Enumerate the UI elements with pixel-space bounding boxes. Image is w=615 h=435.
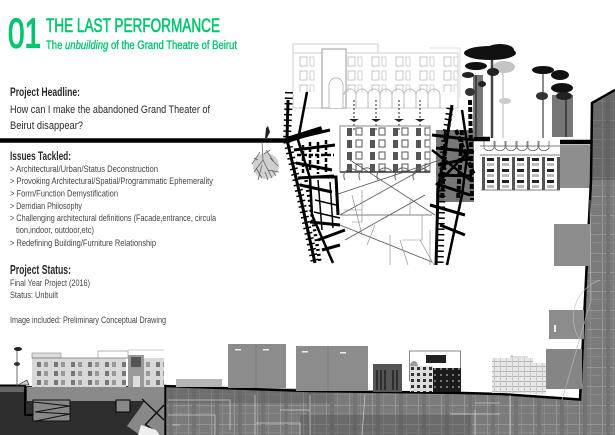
text: status: Final Year Project (2016)	[10, 278, 90, 288]
title: THE LAST PERFORMANCE	[46, 15, 220, 37]
small facade right	[480, 141, 560, 190]
trees	[462, 44, 573, 138]
list: issues: tion,indoor, outdoor,etc)	[16, 225, 94, 235]
small tree left	[14, 347, 29, 386]
heading: issues tackled: Issues Tackled:	[10, 149, 71, 163]
list: issues: > Derridian Philosophy	[10, 201, 82, 211]
dashed drop lines	[349, 100, 425, 130]
text: headline question	[10, 104, 211, 132]
small figure on line	[265, 126, 270, 138]
list: issues: > Redefining Building/Furniture Relationship	[10, 238, 156, 248]
text: headline question: How can I make the abandoned Grand Theater of	[10, 104, 211, 116]
crossing cut lines	[335, 160, 440, 265]
dark building	[373, 364, 402, 392]
subtitle: The unbuilding of the Grand Theatre of Beirut	[46, 40, 238, 52]
right ladder cluster	[430, 100, 474, 265]
main horizon line	[0, 139, 615, 142]
text: headline question: Beirut disappear?	[10, 120, 83, 132]
left ground line	[0, 386, 33, 415]
text: image note: Image included: Preliminary Conceptual Drawing	[10, 315, 166, 325]
left ground mass	[0, 386, 165, 435]
list: issues: > Provoking Architectural/Spatial/Programmatic Ephemerality	[10, 176, 213, 186]
grey massing blocks	[176, 224, 590, 391]
list: issues	[10, 164, 216, 248]
heading: project headline: Project Headline:	[10, 85, 80, 99]
corner building	[410, 351, 461, 392]
right and bottom textured section mass	[165, 90, 615, 435]
section interior light lines	[168, 200, 600, 435]
text: status	[10, 278, 90, 300]
list: issues: > Architectural/Urban/Status Deconstruction	[10, 164, 158, 174]
tree root drawing	[252, 142, 279, 180]
section outline	[165, 90, 615, 435]
dark shading on mass	[165, 92, 615, 435]
heading: project status: Project Status:	[10, 263, 71, 277]
lower theatre facade	[340, 126, 430, 180]
title number: 01	[8, 10, 41, 56]
light building	[492, 355, 546, 394]
left ladder cluster	[287, 92, 345, 263]
text: status: Status: Unbuilt	[10, 290, 58, 300]
left facade	[32, 350, 164, 387]
list: issues: > Form/Function Demystification	[10, 188, 118, 198]
left section basement	[27, 387, 164, 435]
list: issues: > Challenging architectural definitions (Facade,entrance, circula	[10, 213, 216, 223]
grey block behind line	[560, 145, 590, 188]
left ground strip	[0, 386, 25, 392]
upper ghost facade	[293, 44, 463, 108]
